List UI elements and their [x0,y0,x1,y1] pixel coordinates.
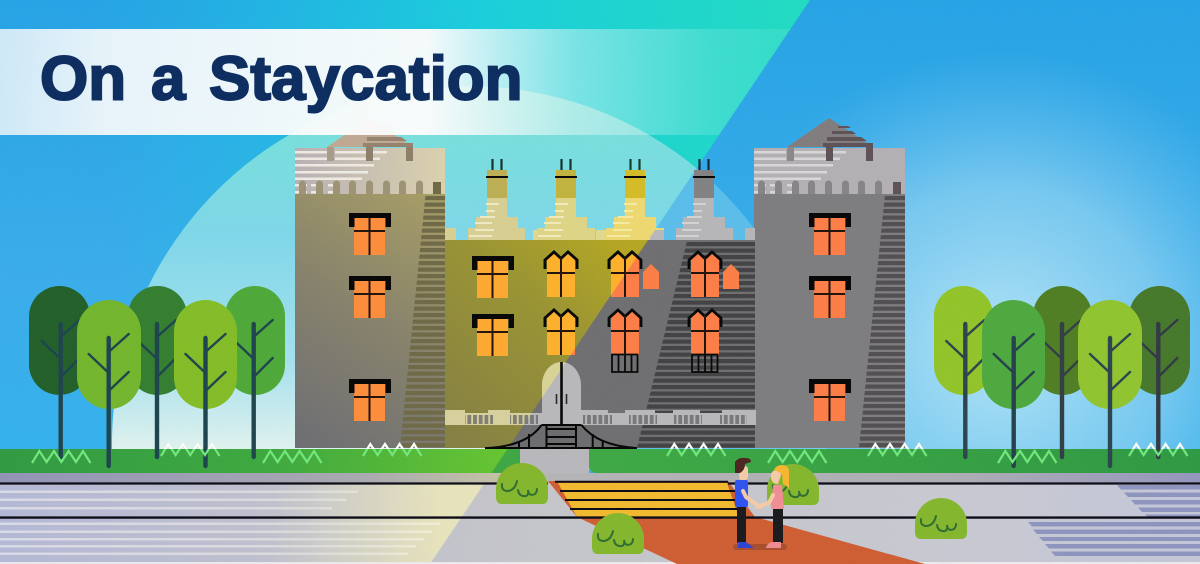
bush 3 [767,464,819,505]
chimney 2 [537,159,595,240]
bush 1 [496,463,548,504]
woman [757,465,789,548]
chimneys [445,159,755,240]
wall lit [445,240,648,448]
stair base unlit [485,425,641,448]
battlements [299,180,423,194]
roof [327,118,413,147]
battlements [758,180,882,194]
wall stripes [637,241,755,448]
roof [787,118,873,147]
man [735,458,760,548]
road and step lines [0,482,1200,518]
bush 4 [915,498,967,539]
trees left [29,286,285,466]
grass tufts [32,444,1188,463]
left road stripes [0,490,440,555]
ground shadow [733,544,787,550]
gothic windows unlit [545,252,721,355]
kerb [0,473,1200,483]
small side windows [643,264,739,289]
tower wall [754,194,905,448]
tower wall [295,194,445,448]
chimney 1 [468,159,525,240]
tree 2 [77,300,141,466]
trees right [934,286,1190,466]
wall stubs [445,228,456,240]
chimney 4 unlit [676,159,733,240]
tree 3 [128,286,187,457]
stair shading [400,194,445,448]
tree 10 [1129,286,1190,457]
central block [445,240,755,448]
castle [295,118,905,448]
tree 9 [1078,300,1142,466]
right tower [754,118,905,448]
lit road [304,484,484,562]
carpet [548,481,925,564]
tower top [754,148,905,195]
bottom edge [0,562,1200,564]
title: On [40,44,126,114]
stair shading [859,194,905,448]
gothic windows lit [545,252,641,355]
grass strip [0,449,1200,473]
left tower [295,118,445,448]
tower windows [809,213,851,421]
tree 1 [29,286,90,457]
tree 7 [982,300,1045,466]
tree 4 [174,300,237,466]
tower top [295,148,445,195]
hood windows lit [472,256,514,356]
title: Staycation [209,44,523,114]
path to door [520,449,589,473]
title: a [151,44,186,114]
tower windows [349,213,391,421]
title banner [0,29,820,135]
road [0,449,1200,564]
bush 2 [592,513,644,554]
tree 6 [934,286,993,457]
balustrade [445,410,756,425]
couple [733,458,789,550]
yellow steps [558,483,739,517]
entrance stairs [485,425,637,448]
road surface [0,483,1200,562]
right road stripes [1028,485,1200,556]
chimney 3 [606,159,664,240]
tree 8 [1033,286,1092,457]
tree 5 [225,286,285,457]
wall unlit [445,240,755,448]
window grilles [612,354,718,372]
central door [542,362,581,426]
